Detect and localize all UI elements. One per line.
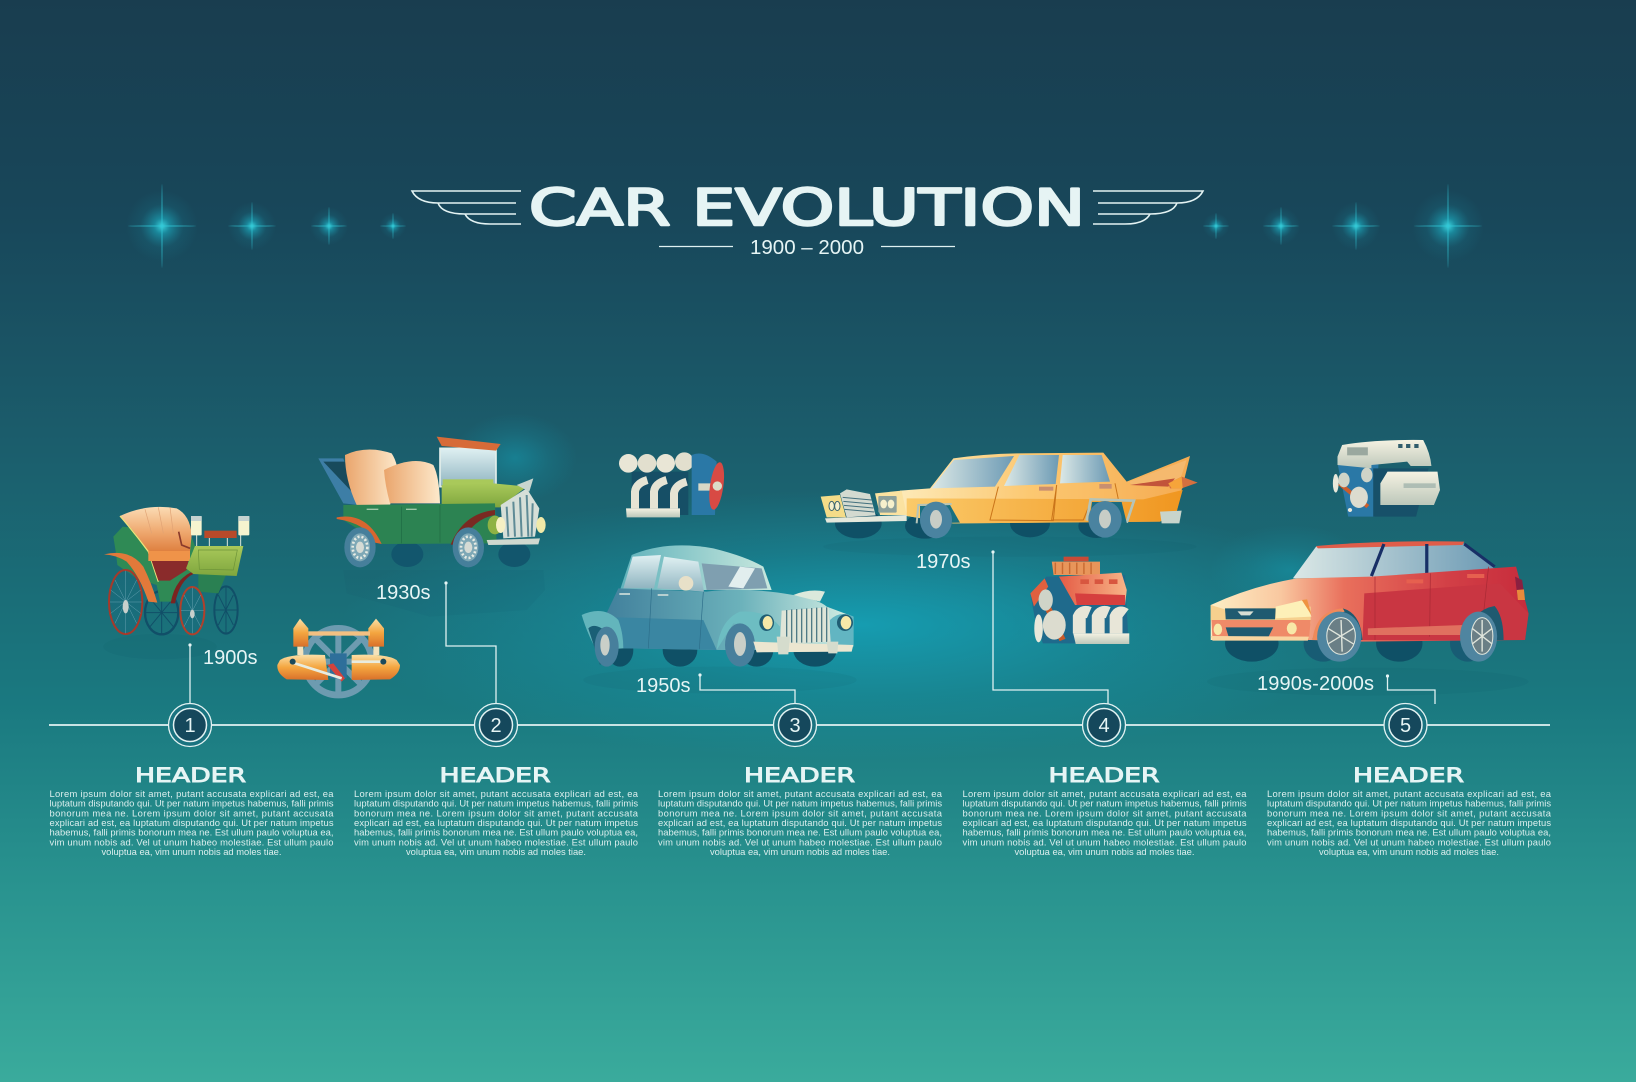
vehicle: 1900s carriage	[103, 507, 249, 659]
glow behind red car	[1210, 525, 1370, 615]
leader line 1990s-2000s	[1388, 676, 1435, 704]
vehicle: 1950s sedan	[582, 545, 857, 693]
star left 3	[310, 207, 348, 245]
star left 2	[228, 202, 276, 250]
star left 4	[380, 213, 406, 239]
column 3 header and text: explicari ad est, ea luptatum disputando qui. Ut per natum impetus	[658, 817, 942, 828]
star right 2	[1262, 207, 1300, 245]
column 4 header and text: HEADER	[1048, 764, 1160, 787]
column 2 header and text: voluptua ea, vim unum nobis ad moles tiae.	[406, 846, 586, 857]
column 4 header and text: habemus, falli primis bonorum mea ne. Est ullum paulo voluptua ea,	[962, 827, 1246, 838]
column 4 header and text	[962, 764, 1247, 857]
column 3 header and text: voluptua ea, vim unum nobis ad moles tiae.	[710, 846, 890, 857]
column 3 header and text: vim unum nobis ad. Vel ut unum habeo molestiae. Est ullum paulo	[658, 836, 942, 847]
glow behind 1930s car	[453, 413, 577, 503]
column 2 header and text: luptatum disputando qui. Ut per natum impetus habemus, falli primis	[354, 798, 638, 809]
column 1 header and text: vim unum nobis ad. Vel ut unum habeo molestiae. Est ullum paulo	[50, 836, 334, 847]
column 5 header and text: bonorum mea ne. Lorem ipsum dolor sit amet, putant accusata	[1267, 807, 1552, 818]
star right 4	[1412, 184, 1484, 268]
column 5 header and text: luptatum disputando qui. Ut per natum impetus habemus, falli primis	[1267, 798, 1551, 809]
column 5 header and text: vim unum nobis ad. Vel ut unum habeo molestiae. Est ullum paulo	[1267, 836, 1551, 847]
star left 1	[126, 184, 198, 268]
icon: steam engine with flywheel	[277, 619, 400, 695]
column 3 header and text	[658, 764, 943, 857]
left wing ornament	[412, 191, 521, 224]
leader line 1930s	[446, 583, 496, 704]
vehicle: 1930s truck	[318, 437, 546, 617]
column 3 header and text: luptatum disputando qui. Ut per natum impetus habemus, falli primis	[658, 798, 942, 809]
leader line end dots	[188, 550, 1389, 678]
column 2 header and text: vim unum nobis ad. Vel ut unum habeo molestiae. Est ullum paulo	[354, 836, 638, 847]
icon: inline engine with red fan	[619, 452, 727, 517]
marker 4	[1082, 704, 1126, 746]
timeline axis	[49, 724, 1550, 726]
column 5 header and text: voluptua ea, vim unum nobis ad moles tiae.	[1319, 846, 1499, 857]
marker 2	[474, 704, 518, 746]
marker 2: 2	[490, 715, 502, 737]
column 2 header and text: Lorem ipsum dolor sit amet, putant accusata explicari ad est, ea	[354, 788, 639, 799]
column 4 header and text: voluptua ea, vim unum nobis ad moles tiae.	[1014, 846, 1194, 857]
column 1 header and text: habemus, falli primis bonorum mea ne. Est ullum paulo voluptua ea,	[50, 827, 334, 838]
marker 1: 1	[184, 715, 196, 737]
column 5 header and text: Lorem ipsum dolor sit amet, putant accusata explicari ad est, ea	[1267, 788, 1552, 799]
marker 4: 4	[1098, 715, 1110, 737]
star right 1	[1203, 213, 1229, 239]
marker 5: 5	[1400, 715, 1411, 737]
column 1 header and text: HEADER	[135, 764, 246, 787]
column 1 header and text: voluptua ea, vim unum nobis ad moles tiae.	[102, 846, 282, 857]
column 4 header and text: vim unum nobis ad. Vel ut unum habeo molestiae. Est ullum paulo	[962, 836, 1246, 847]
vehicle: 1990s-2000s red hatchback	[1207, 541, 1529, 696]
column 1 header and text: explicari ad est, ea luptatum disputando qui. Ut per natum impetus	[50, 817, 334, 828]
leader line 1970s	[993, 552, 1108, 704]
central glow	[340, 490, 1380, 760]
column 3 header and text: habemus, falli primis bonorum mea ne. Est ullum paulo voluptua ea,	[658, 827, 942, 838]
icon: compact modern engine	[1333, 440, 1440, 517]
right wing ornament	[1093, 191, 1203, 224]
column 4 header and text: bonorum mea ne. Lorem ipsum dolor sit amet, putant accusata	[962, 807, 1247, 818]
star right 3	[1332, 202, 1380, 250]
leader line 1950s	[700, 675, 795, 704]
star lights row	[126, 184, 1484, 268]
column 5 header and text: habemus, falli primis bonorum mea ne. Est ullum paulo voluptua ea,	[1267, 827, 1551, 838]
year label 1930s: 1930s	[376, 582, 430, 604]
marker 3: 3	[789, 715, 801, 737]
column 2 header and text: habemus, falli primis bonorum mea ne. Est ullum paulo voluptua ea,	[354, 827, 638, 838]
marker 1	[168, 704, 212, 746]
marker 3	[774, 704, 816, 746]
column 2 header and text: HEADER	[440, 764, 550, 787]
column 3 header and text: HEADER	[744, 764, 855, 787]
column 5 header and text: explicari ad est, ea luptatum disputando qui. Ut per natum impetus	[1267, 817, 1551, 828]
vehicle: 1970s yellow sedan	[821, 453, 1198, 557]
column 1 header and text	[50, 764, 334, 857]
year label 1990s-2000s: 1990s-2000s	[1257, 673, 1374, 695]
column 1 header and text: luptatum disputando qui. Ut per natum impetus habemus, falli primis	[50, 798, 334, 809]
column 1 header and text: Lorem ipsum dolor sit amet, putant accusata explicari ad est, ea	[50, 788, 334, 799]
column 2 header and text: bonorum mea ne. Lorem ipsum dolor sit amet, putant accusata	[354, 807, 639, 818]
column 4 header and text: luptatum disputando qui. Ut per natum impetus habemus, falli primis	[962, 798, 1247, 809]
column 4 header and text: explicari ad est, ea luptatum disputando qui. Ut per natum impetus	[962, 817, 1247, 828]
column 2 header and text	[354, 764, 639, 857]
subtitle with date range: 1900 – 2000	[750, 237, 864, 259]
column 5 header and text	[1267, 764, 1552, 857]
marker 5	[1384, 704, 1427, 746]
column 2 header and text: explicari ad est, ea luptatum disputando qui. Ut per natum impetus	[354, 817, 638, 828]
column 5 header and text: HEADER	[1353, 764, 1464, 787]
year label 1900s: 1900s	[203, 647, 258, 669]
year label 1970s: 1970s	[916, 551, 970, 573]
column 3 header and text: bonorum mea ne. Lorem ipsum dolor sit amet, putant accusata	[658, 807, 943, 818]
title: CAR EVOLUTION	[529, 179, 1085, 237]
column 3 header and text: Lorem ipsum dolor sit amet, putant accusata explicari ad est, ea	[658, 788, 943, 799]
column 4 header and text: Lorem ipsum dolor sit amet, putant accusata explicari ad est, ea	[962, 788, 1247, 799]
year label 1950s: 1950s	[636, 675, 690, 697]
icon: V8 engine with air filter	[1030, 557, 1129, 644]
leader line 1900s	[189, 645, 191, 704]
column 1 header and text: bonorum mea ne. Lorem ipsum dolor sit amet, putant accusata	[50, 807, 334, 818]
